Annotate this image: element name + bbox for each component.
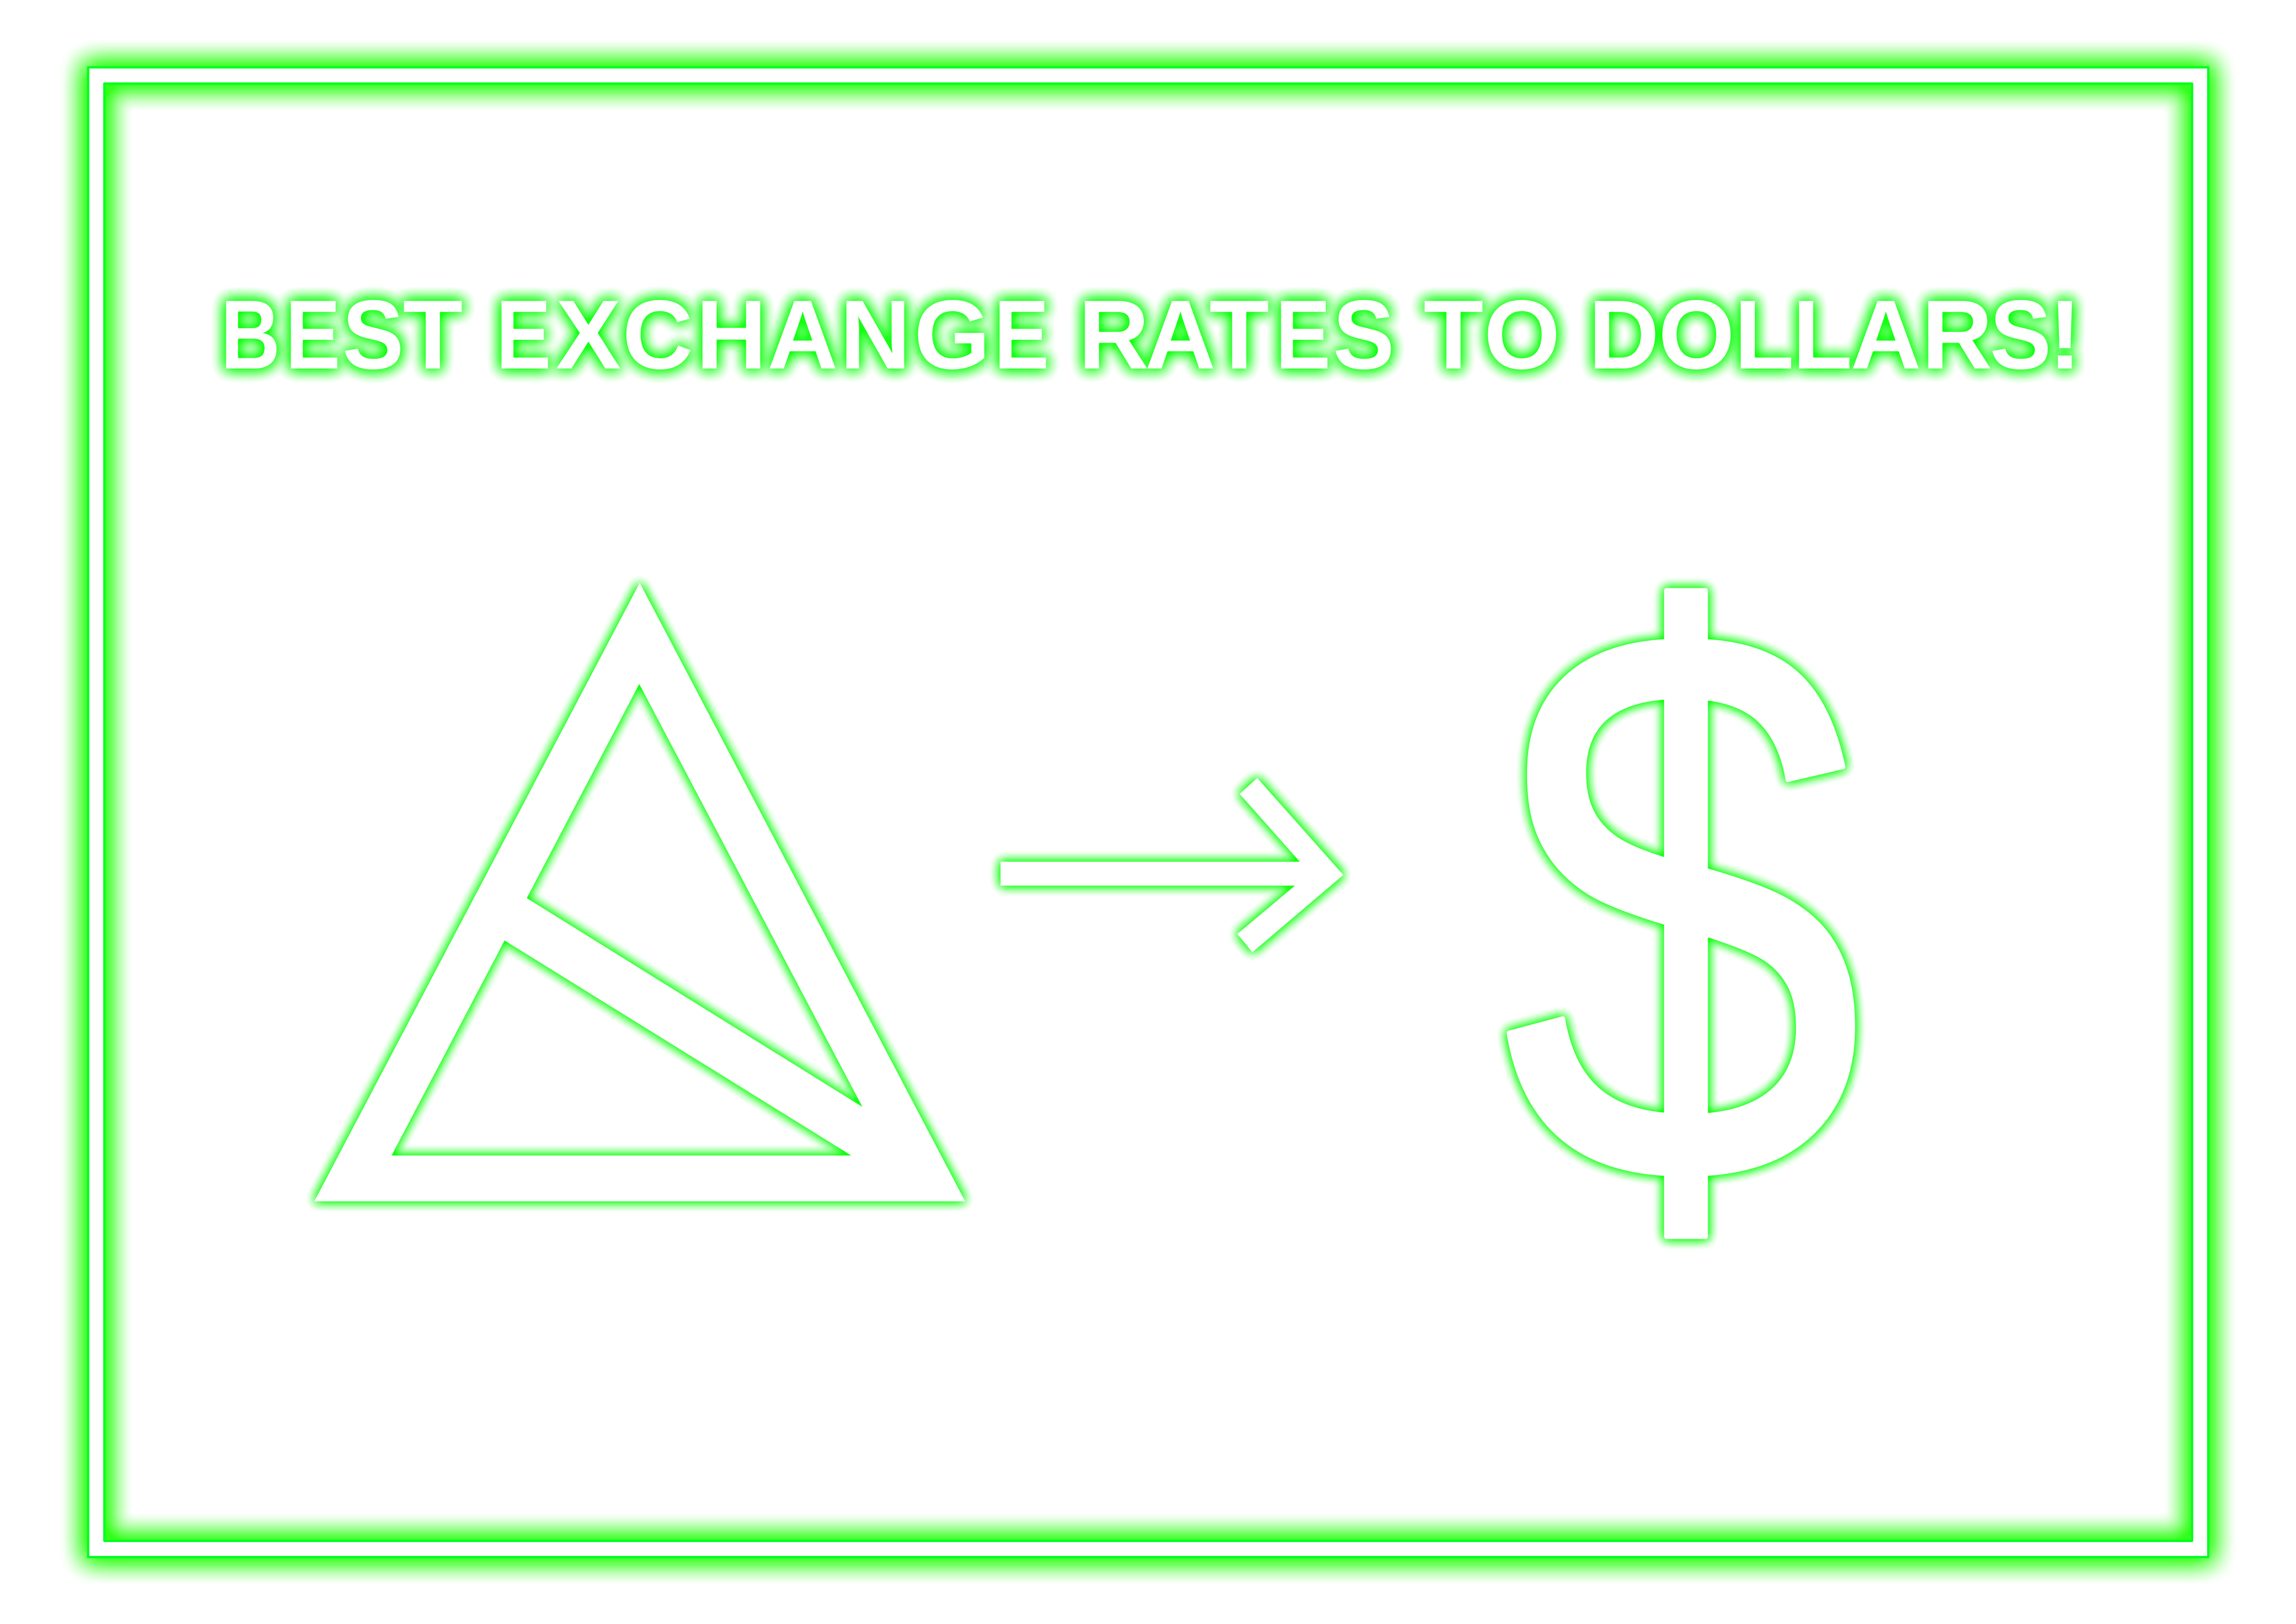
icon: triangle logo (314, 583, 965, 1201)
icon: arrow (1001, 778, 1343, 952)
icon: dollar sign: $ (1502, 459, 1863, 1350)
title: BEST EXCHANGE RATES TO DOLLARS! (220, 280, 2081, 389)
